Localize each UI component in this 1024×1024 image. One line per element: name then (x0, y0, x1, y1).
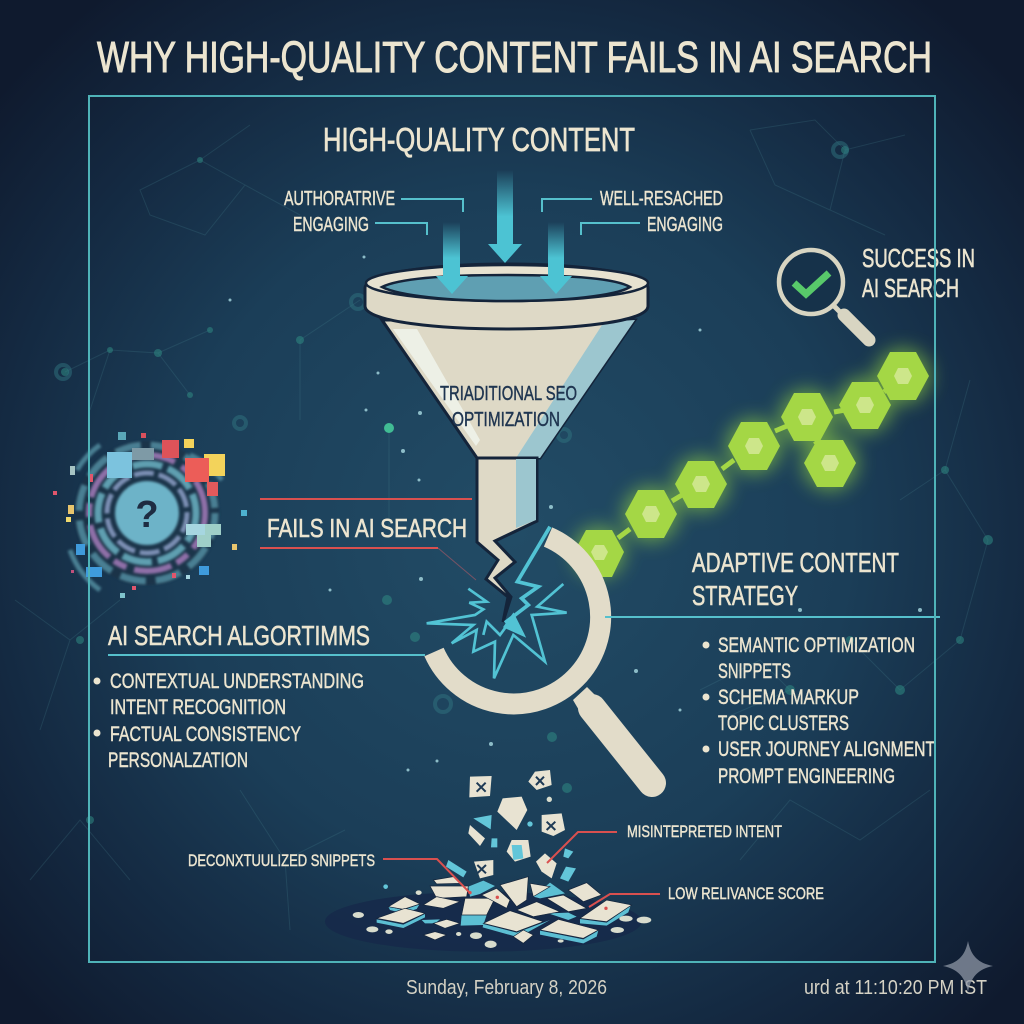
funnel label (440, 383, 577, 431)
cone glass highlights (393, 320, 635, 458)
label: success in AI search (862, 243, 975, 303)
icon: pile of broken content (325, 770, 651, 952)
callout: misinterpreted intent: MISINTEPRETED INTENT (627, 822, 782, 841)
funnel label: OPTIMIZATION (452, 409, 560, 431)
callout: deconxtuulized snippets: DECONXTUULIZED SNIPPETS (188, 851, 375, 870)
funnel label: TRIADITIONAL SEO (440, 383, 577, 405)
red dots (468, 891, 608, 910)
heading: STRATEGY (692, 580, 798, 611)
labels: left inputs (284, 188, 395, 236)
panel: fails in AI search (260, 499, 476, 580)
panel: high-quality content inputs (284, 121, 723, 236)
list: USER JOURNEY ALIGNMENT (718, 738, 935, 761)
callout: low relevance score: LOW RELIVANCE SCORE (668, 884, 824, 903)
broken funnel neck (477, 458, 537, 622)
icon: success magnifier (779, 250, 869, 340)
list: TOPIC CLUSTERS (718, 712, 849, 735)
main frame (89, 96, 935, 962)
falling shards with x marks (468, 770, 565, 878)
labels: left inputs: ENGAGING (293, 214, 369, 236)
list: PERSONALZATION (108, 749, 248, 772)
connector brackets (375, 199, 640, 235)
red callout lines (260, 499, 472, 548)
footer date: Sunday, February 8, 2026 (406, 977, 607, 999)
small debris (353, 890, 651, 948)
panel: adaptive content strategy (605, 547, 940, 788)
list: PROMPT ENGINEERING (718, 765, 895, 788)
funnel water (382, 275, 630, 301)
shadow ellipse (325, 892, 642, 952)
lens ring (434, 537, 601, 704)
labels: right inputs (600, 188, 723, 236)
panel: AI search algorithms (94, 620, 425, 772)
heading: high-quality content: HIGH-QUALITY CONTENT (323, 121, 635, 158)
label: success in AI search: SUCCESS IN (862, 243, 975, 273)
bullets (94, 678, 100, 736)
labels: left inputs: AUTHORATRIVE (284, 188, 395, 210)
list: SEMANTIC OPTIMIZATION (718, 634, 915, 657)
heading: fails: FAILS IN AI SEARCH (267, 513, 467, 543)
funnel rim (365, 264, 648, 329)
list (718, 634, 935, 788)
scattered squares (53, 432, 247, 598)
label: success in AI search: AI SEARCH (862, 273, 959, 303)
labels: right inputs: WELL-RESACHED (600, 188, 723, 210)
connector line (605, 616, 940, 618)
question mark: ? (135, 494, 159, 536)
labels: right inputs: ENGAGING (647, 214, 723, 236)
callout: deconxtuulized snippets (188, 851, 470, 893)
heading underline (108, 654, 425, 656)
callout: misinterpreted intent (547, 822, 782, 863)
footer time: urd at 11:10:20 PM IST (804, 977, 987, 999)
handle (573, 687, 600, 717)
list: SCHEMA MARKUP (718, 686, 859, 709)
hexagons (574, 352, 929, 577)
funnel cone (382, 320, 635, 458)
icon: sparkle watermark (943, 941, 993, 992)
list (108, 670, 364, 772)
faint pointer (438, 548, 476, 580)
heading (692, 547, 899, 611)
crack burst (427, 527, 567, 678)
heading: AI SEARCH ALGORTIMMS (108, 620, 370, 651)
callout: low relevance score (589, 884, 824, 907)
funnel (365, 170, 648, 622)
list: CONTEXTUAL UNDERSTANDING (110, 670, 364, 693)
chain of green hexagons (573, 348, 931, 578)
rubble slabs (377, 877, 632, 943)
list: INTENT RECOGNITION (110, 696, 286, 719)
list: FACTUAL CONSISTENCY (110, 723, 301, 746)
bullets (702, 642, 710, 752)
big magnifying glass (434, 537, 652, 783)
icon: confusion vortex (53, 432, 247, 598)
cyan slab edges (377, 881, 631, 943)
list: SNIPPETS (718, 660, 791, 683)
arrows into funnel (436, 170, 572, 294)
heading: ADAPTIVE CONTENT (692, 547, 899, 578)
